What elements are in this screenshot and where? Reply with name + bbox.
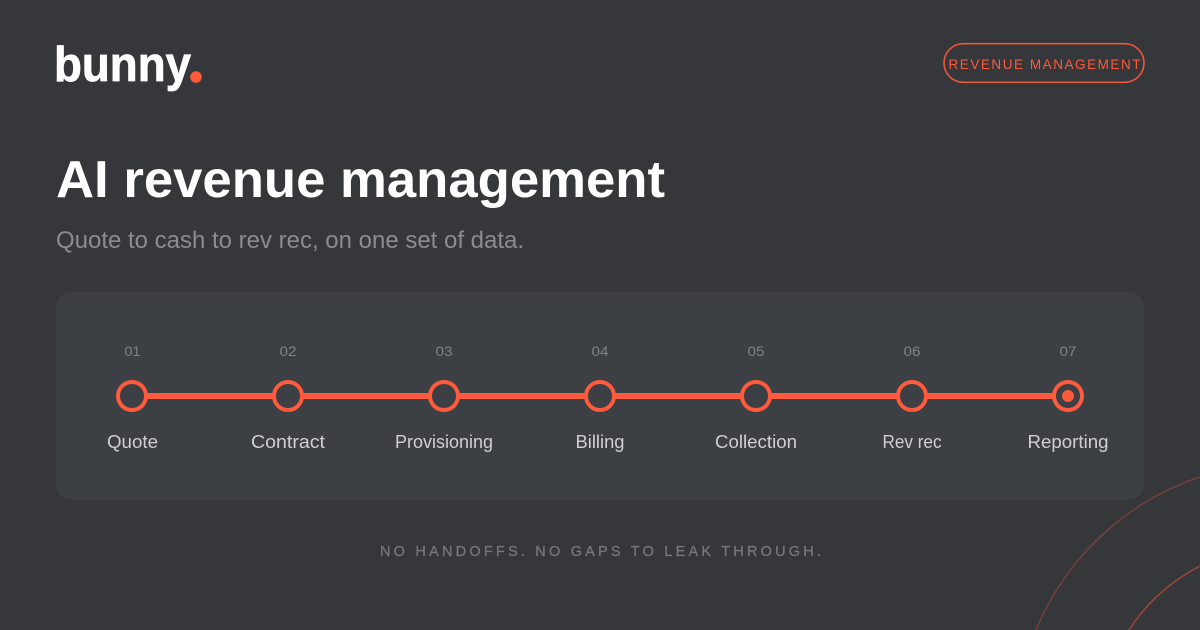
step 1: Quote: 01 [124, 344, 140, 359]
step 4: Billing: 04 [592, 344, 609, 359]
step 6: Rev rec: 06 [904, 344, 920, 359]
category pill [944, 44, 1144, 82]
step 4: Billing: Billing [576, 432, 624, 452]
step 7: Reporting: 07 [1060, 344, 1076, 359]
step 4: Billing [576, 344, 624, 452]
step 5: Collection [715, 344, 797, 452]
step 2: Contract: Contract [251, 432, 325, 452]
logo: bunny [54, 38, 191, 92]
step 6: Rev rec [882, 344, 942, 452]
title: AI revenue management [56, 151, 665, 209]
step 3: Provisioning: 03 [436, 344, 452, 359]
step 1: Quote: Quote [107, 432, 158, 452]
subtitle: Quote to cash to rev rec, on one set of data. [56, 227, 524, 254]
step 7: Reporting: Reporting [1028, 432, 1108, 452]
step 6: Rev rec: Rev rec [882, 432, 942, 452]
category pill: REVENUE MANAGEMENT [948, 57, 1140, 72]
step 1: Quote [107, 344, 158, 452]
step 5: Collection: Collection [715, 432, 797, 452]
footer tagline: NO HANDOFFS. NO GAPS TO LEAK THROUGH. [380, 544, 821, 560]
decorative arcs [1036, 477, 1200, 630]
panel: process timeline [56, 292, 1144, 500]
step 2: Contract: 02 [280, 344, 296, 359]
connector line [132, 393, 1068, 399]
step 3: Provisioning [395, 344, 493, 452]
step 5: Collection: 05 [748, 344, 764, 359]
step 2: Contract [251, 344, 325, 452]
step 7: Reporting [1028, 344, 1108, 452]
step 3: Provisioning: Provisioning [395, 432, 493, 452]
